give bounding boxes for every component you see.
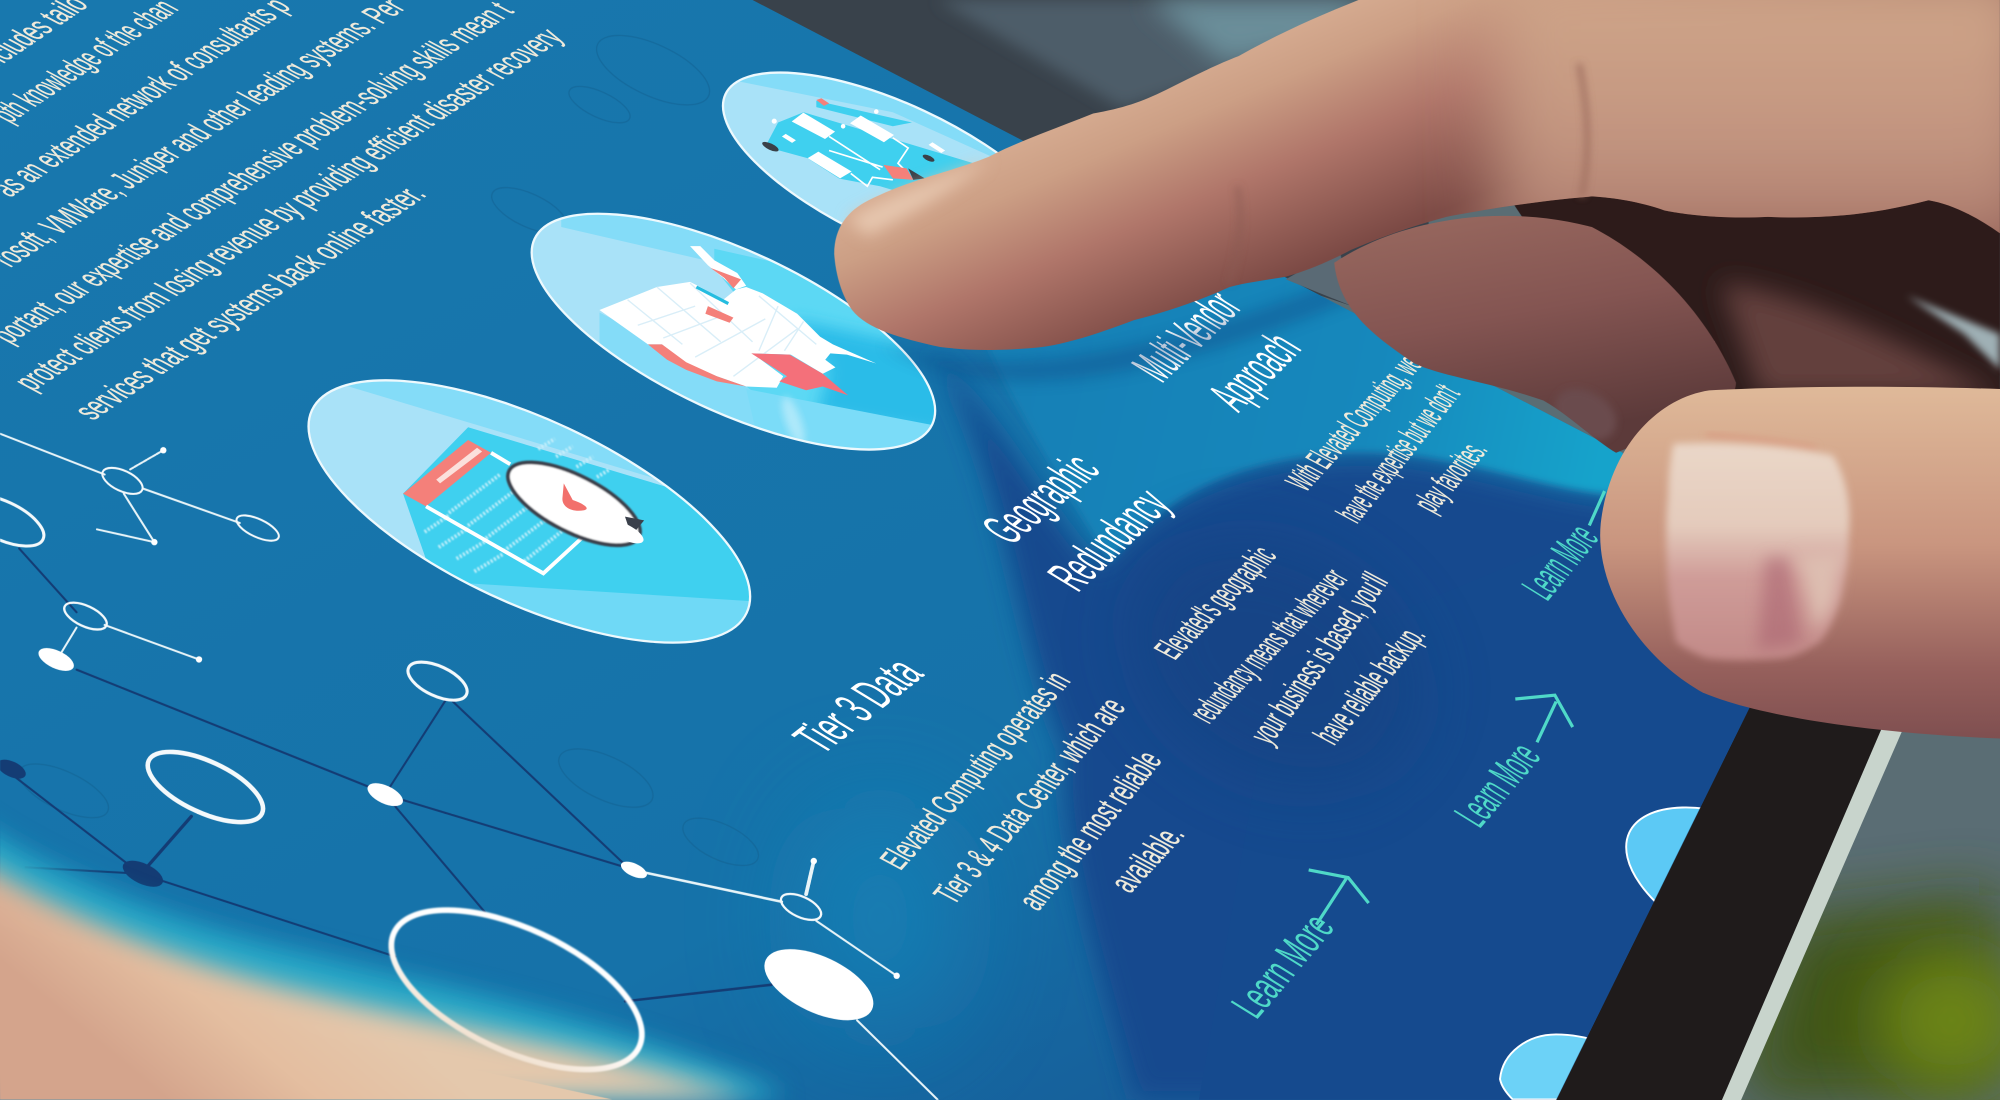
feature icon: US map xyxy=(501,166,969,497)
body: Tier 3 Data xyxy=(872,666,1193,916)
index finger: hand section xyxy=(1492,0,2000,255)
screen: dark lower fill xyxy=(1199,708,1750,1100)
thumb xyxy=(1600,387,2000,739)
disc 2 fill xyxy=(510,191,969,472)
dial icon: data rows xyxy=(425,439,610,571)
column: Geographic Redundancy xyxy=(970,445,1573,834)
network: white rings xyxy=(0,462,825,925)
large network ring over palm xyxy=(368,877,665,1100)
body: Tier 3 Data: among the most reliable xyxy=(1010,745,1170,916)
network icon: dark accent xyxy=(908,168,925,180)
disc 1 fill xyxy=(310,382,749,642)
dial icon: red window header xyxy=(403,440,491,506)
body: Multi-Vendor Approach xyxy=(1278,349,1495,528)
body: Geographic Redundancy: your business is based, you'll xyxy=(1242,567,1396,750)
disc 3 fill xyxy=(702,64,1110,293)
column: Multi-Vendor Approach xyxy=(1120,282,1608,607)
dial icon: white window frame xyxy=(426,506,583,573)
screen reflection: darker blob xyxy=(1086,487,1465,839)
map: north tip xyxy=(690,246,746,290)
network: dark connectors xyxy=(0,548,772,1001)
palm teal glow xyxy=(0,804,778,1099)
heading: Multi-Vendor Approach: Approach xyxy=(1197,324,1313,420)
network icon: red accent xyxy=(883,165,913,180)
body: Tier 3 Data: Tier 3 & 4 Data Center, which are xyxy=(925,692,1133,909)
body: Geographic Redundancy: redundancy means that wherever xyxy=(1181,563,1356,728)
arrow xyxy=(1309,870,1369,925)
thumb: cuticle xyxy=(1707,435,1816,449)
screen reflection: dark shadow xyxy=(929,344,1773,1099)
faint network background xyxy=(12,21,765,875)
foliage: olive xyxy=(1875,950,2000,1091)
map: white states xyxy=(599,282,876,388)
link: Learn More: Learn More xyxy=(1221,906,1344,1026)
network: dark nodes xyxy=(0,756,167,892)
hand: gap sliver xyxy=(1286,249,1352,306)
foliage: dark green xyxy=(1735,893,2000,1099)
heading: Tier 3 Data: Tier 3 Data xyxy=(781,649,936,762)
hand: middle finger xyxy=(1334,216,1736,453)
heading: Geographic Redundancy: Geographic xyxy=(970,445,1113,553)
arrow xyxy=(1589,491,1605,526)
network icon: thin links xyxy=(829,136,908,186)
thumb: fingernail xyxy=(1666,443,1849,660)
body: Geographic Redundancy: Elevated's geographic xyxy=(1146,541,1284,664)
heading: Multi-Vendor Approach xyxy=(1120,282,1313,420)
hand: middle fingernail xyxy=(1545,378,1626,451)
hand: light gap behind fingers xyxy=(1907,296,2000,370)
tablet side bezel xyxy=(1550,676,1909,1100)
partial feature disc, bottom xyxy=(1500,1034,1633,1099)
hand: ring finger xyxy=(1721,283,2000,395)
network: white nodes xyxy=(35,447,900,1035)
heading: Multi-Vendor Approach: Multi-Vendor xyxy=(1120,282,1254,391)
dial icon: gauge xyxy=(496,446,651,562)
body: Multi-Vendor Approach: play favorites. xyxy=(1405,435,1495,518)
bezel highlight xyxy=(1148,0,1378,64)
paragraph text: services that get systems back online faster. xyxy=(65,180,435,425)
thumb: nail bruise xyxy=(1758,557,1801,651)
link: Learn More: Learn More xyxy=(1512,516,1608,607)
feature icon: network diagram xyxy=(696,32,1110,315)
network diagram xyxy=(0,434,938,1099)
link: Learn More xyxy=(1512,491,1608,607)
body: Multi-Vendor Approach: have the expertise but we don't xyxy=(1329,379,1468,528)
heading: Geographic Redundancy xyxy=(970,445,1183,600)
finger shadow on screen xyxy=(880,274,1352,380)
link: Learn More xyxy=(1444,695,1573,834)
column: Tier 3 Data xyxy=(781,649,1369,1026)
body: Tier 3 Data: available. xyxy=(1101,819,1193,898)
map: great lakes xyxy=(696,287,728,304)
hand: dark gap between fingers xyxy=(1505,191,2000,421)
index finger: knuckle creases xyxy=(1230,64,1587,283)
map: red states xyxy=(648,268,848,395)
screen reflection: bright area xyxy=(991,277,1623,560)
heading: Geographic Redundancy: Redundancy xyxy=(1036,480,1183,600)
body: Multi-Vendor Approach: With Elevated Computing, we xyxy=(1278,349,1430,496)
network: white connectors xyxy=(0,434,938,1099)
index finger xyxy=(834,0,2000,350)
body: Geographic Redundancy: have reliable backup. xyxy=(1306,620,1433,750)
bezel lighter strip xyxy=(938,0,1365,108)
tablet top bezel xyxy=(740,0,1429,332)
palm: bottom fill xyxy=(0,925,612,1099)
link: Learn More: Learn More xyxy=(1444,735,1551,834)
map: state borders xyxy=(628,283,816,376)
dial icon: header bar xyxy=(436,448,482,483)
body: Tier 3 Data: Elevated Computing operates in xyxy=(872,666,1078,875)
arrow xyxy=(1515,695,1573,742)
partial feature disc, lower right xyxy=(1602,775,1887,998)
feature icon: data center dial xyxy=(307,379,752,644)
screen reflection: lower glow xyxy=(812,845,956,1018)
network icon: white blocks xyxy=(772,109,945,178)
body: Geographic Redundancy xyxy=(1146,541,1433,750)
index finger: nail edge light xyxy=(848,159,989,236)
paragraph text xyxy=(0,0,572,425)
palm in foreground xyxy=(0,842,753,1099)
thumb: nail pale corner xyxy=(1798,551,1843,631)
